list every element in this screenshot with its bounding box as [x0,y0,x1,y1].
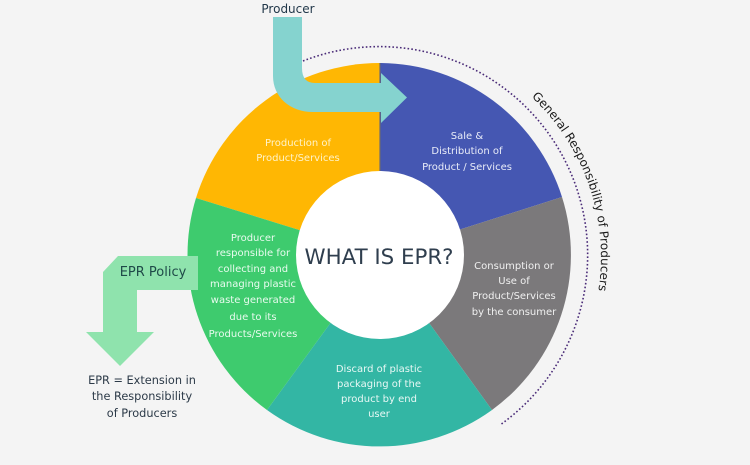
label: production: Production of [265,138,331,149]
label: discard: packaging of the [337,379,421,390]
center title: WHAT IS EPR? [304,245,454,269]
label: consumption: Use of [498,276,530,287]
label: discard: user [368,409,391,420]
label: consumption: by the consumer [472,307,557,318]
label: producer responsible: Products/Services [209,329,297,340]
label: producer: Producer [261,2,315,16]
label: sale: Distribution of [431,146,503,157]
label: producer responsible [209,233,297,340]
label: producer responsible: managing plastic [210,279,296,290]
arrow: EPR policy [86,256,198,366]
text: EPR definition: of Producers [107,407,177,420]
label: consumption: Product/Services [472,291,556,302]
label: discard [336,364,422,420]
label: consumption [472,261,557,318]
text: EPR definition [88,374,196,420]
label: consumption: Consumption or [474,261,555,272]
segment: consumption [380,197,571,410]
dotted arc: general responsibility [303,47,588,425]
arrow: producer [273,17,407,123]
label: producer responsible: due to its [229,312,277,323]
donut chart: EPR responsibility stages [188,63,571,446]
segment: production [196,63,380,255]
curved label: general responsibility: General Responsibility of Producers [534,92,610,291]
label: producer responsible: collecting and [218,264,288,275]
label: producer responsible: responsible for [216,248,291,259]
label: discard: product by end [341,394,417,405]
label: sale: Sale & [451,131,483,142]
label: sale: Product / Services [422,162,512,173]
center circle [296,171,464,339]
segment: sale and distribution [380,63,562,255]
segment divider [379,63,381,171]
text: EPR definition: EPR = Extension in [88,374,196,387]
label: discard: Discard of plastic [336,364,422,375]
label: producer responsible: waste generated [211,295,295,306]
text: EPR definition: the Responsibility [92,390,192,403]
segment: producer responsible [188,198,380,410]
label: production [256,138,340,164]
label: production: Product/Services [256,153,340,164]
segment: discard [267,255,492,446]
label: producer responsible: Producer [231,233,276,244]
label: sale [422,131,512,173]
label: EPR policy: EPR Policy [120,265,187,280]
